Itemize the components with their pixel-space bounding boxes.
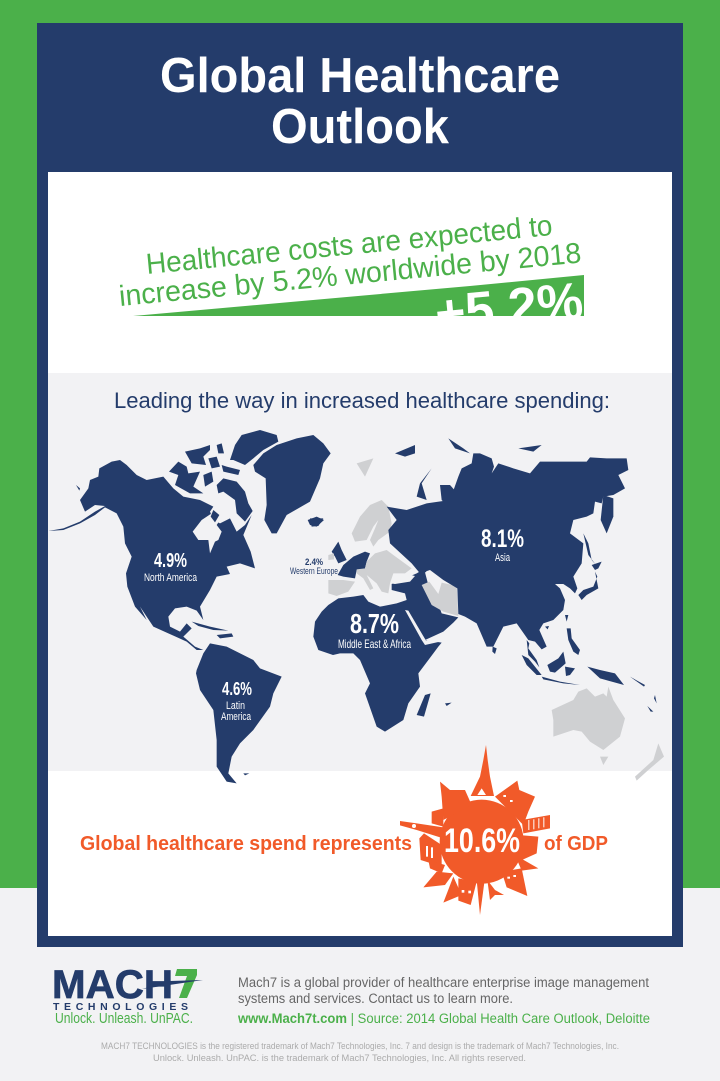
label: Western Europe: Western Europe — [290, 566, 338, 577]
green wedge with +5.2%: +5.2% — [433, 272, 585, 344]
label: Latin America — [221, 679, 252, 723]
label: Middle East and Africa: 8.7% — [350, 608, 399, 639]
label: Asia: 8.1% — [481, 525, 524, 553]
title: Global Healthcare — [160, 49, 560, 103]
logo: Mach7: Unlock. Unleash. UnPAC. — [55, 1010, 193, 1027]
map: Svalbard, Australia, New Zealand grey — [357, 458, 664, 781]
legal text: Unlock. Unleash. UnPAC. is the trademark of Mach7 Technologies, Inc. All rights reserved. — [153, 1053, 526, 1063]
GDP text right: of GDP — [544, 833, 608, 855]
label: Latin America: 4.6% — [222, 679, 252, 699]
logo: Mach7: MACH — [52, 963, 173, 1007]
map heading: Leading the way in increased healthcare spending: — [114, 388, 610, 413]
label: North America: North America — [144, 572, 198, 584]
label: Asia — [481, 525, 524, 564]
legal text: MACH7 TECHNOLOGIES is the registered trademark of Mach7 Technologies, Inc. 7 and design is the trademark of Mach7 Technologies, Inc. — [101, 1041, 619, 1051]
map: Africa, Middle East, Western Europe — [310, 518, 458, 732]
company description — [238, 975, 649, 1006]
title — [160, 49, 560, 154]
label: Western Europe: 2.4% — [305, 557, 323, 567]
GDP figure: 10.6% — [444, 822, 520, 860]
label: Latin America: Latin — [226, 700, 245, 712]
slanted heading: Healthcare costs are expected to — [145, 210, 554, 281]
website and source: www.Mach7t.com | Source: 2014 Global Health Care Outlook, Deloitte — [237, 1011, 650, 1026]
green wedge with +5.2% — [134, 275, 584, 316]
icon: landmark burst — [400, 745, 550, 915]
label: Asia: Asia — [495, 552, 511, 564]
panel: GDP statement — [80, 745, 608, 915]
logo: Mach7 — [52, 963, 203, 1027]
slanted heading: increase by 5.2% worldwide by 2018 — [118, 237, 583, 313]
label: Middle East and Africa — [338, 608, 411, 651]
map: Asia — [387, 438, 657, 712]
label: North America: 4.9% — [154, 550, 187, 572]
panel: world map — [48, 373, 672, 783]
logo: Mach7: TECHNOLOGIES — [53, 1001, 188, 1013]
main navy panel — [37, 23, 683, 947]
map: Arctic Canada, Greenland, Iceland — [169, 430, 331, 533]
label: North America — [144, 550, 198, 584]
GDP text left: Global healthcare spend represents — [80, 833, 412, 855]
map: North and South America — [48, 460, 282, 783]
label: Latin America: America — [221, 711, 252, 723]
panel: cost increase callout — [120, 217, 584, 316]
label: Middle East and Africa: Middle East & Africa — [338, 637, 411, 651]
title: Outlook — [271, 100, 450, 154]
map: Eastern Europe, Scandinavia, Iran grey — [328, 500, 458, 616]
company description: systems and services. Contact us to learn more. — [238, 991, 513, 1006]
company description: Mach7 is a global provider of healthcare enterprise image management — [238, 975, 649, 990]
legal text — [101, 1041, 619, 1063]
label: Western Europe — [290, 557, 338, 577]
